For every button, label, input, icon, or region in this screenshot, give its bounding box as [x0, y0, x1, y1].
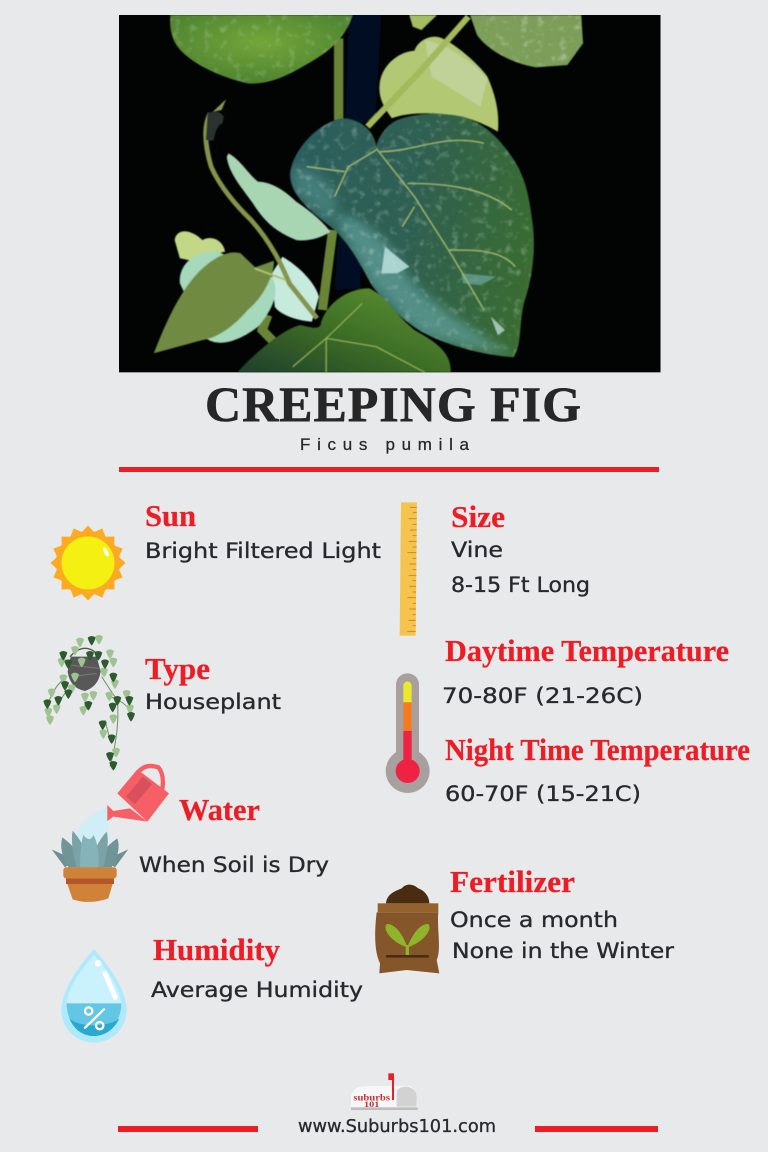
icon: watering can and potted succulent — [52, 766, 169, 902]
icon: ruler — [400, 502, 417, 636]
text: fertilizer frequency: Once a month — [450, 908, 618, 933]
heading: type: Type — [145, 651, 210, 686]
logo: mailbox: 101 — [364, 1100, 379, 1109]
subtitle: Ficus pumila — [300, 435, 470, 454]
icon: fertilizer bag — [375, 885, 439, 973]
logo: mailbox — [351, 1073, 418, 1110]
text: plant type: Houseplant — [145, 690, 281, 715]
text: watering guidance: When Soil is Dry — [139, 853, 329, 878]
text: length: 8-15 Ft Long — [451, 573, 590, 598]
text: night range: 60-70F (15-21C) — [445, 782, 641, 807]
heading: night time temperature: Night Time Temperature — [445, 732, 750, 767]
heading: humidity: Humidity — [153, 932, 280, 967]
icon: sun — [50, 526, 126, 600]
text: sun requirement: Bright Filtered Light — [145, 539, 381, 564]
title: CREEPING FIG — [205, 376, 581, 432]
text: daytime range: 70-80F (21-26C) — [442, 684, 643, 709]
logo: mailbox: suburbs — [353, 1092, 391, 1102]
icon: hanging plant — [43, 635, 135, 771]
photo: creeping fig leaves — [119, 15, 661, 372]
icon: thermometer — [386, 673, 430, 793]
text: winter note: None in the Winter — [452, 939, 674, 964]
icon: humidity drop — [61, 949, 127, 1043]
text: humidity level: Average Humidity — [151, 978, 363, 1003]
footer website: www.Suburbs101.com — [298, 1117, 496, 1137]
heading: size: Size — [451, 499, 505, 534]
heading: water: Water — [179, 792, 260, 827]
heading: daytime temperature: Daytime Temperature — [445, 633, 729, 668]
text: growth form: Vine — [451, 538, 503, 563]
heading: sun: Sun — [145, 498, 196, 533]
heading: fertilizer: Fertilizer — [450, 864, 575, 899]
